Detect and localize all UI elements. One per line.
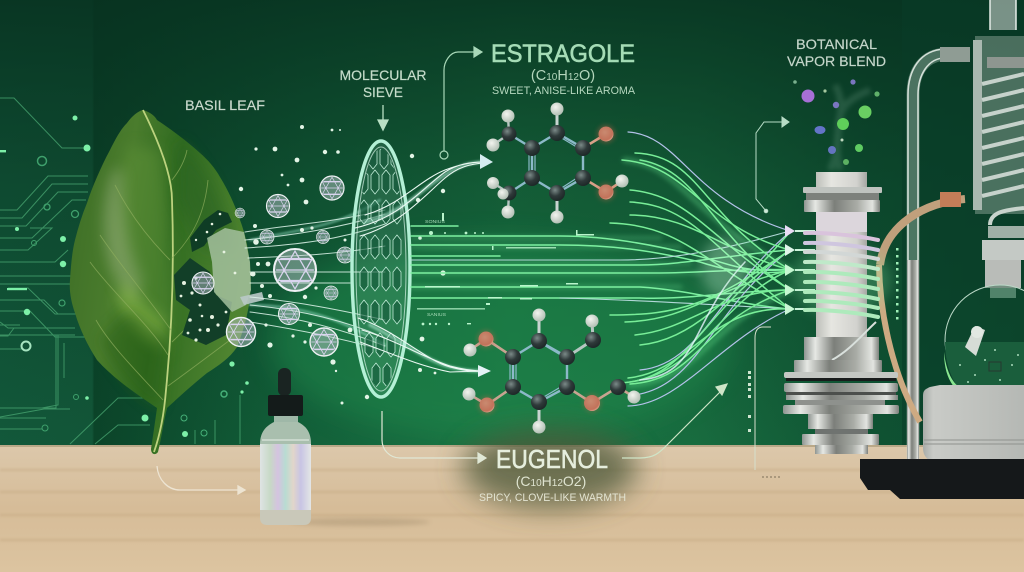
column reactor — [783, 172, 899, 454]
tiny label: SANIUS — [427, 312, 446, 317]
heading: botanical vapor blend: VAPOR BLEND — [787, 53, 886, 69]
heating mantle — [923, 385, 1024, 466]
vapor particles — [793, 79, 880, 170]
arrowheads into coils — [785, 225, 815, 315]
heading: eugenol: (C10H12O2) — [516, 473, 586, 489]
heading: estragole: (C10H12O) — [531, 68, 595, 84]
flask — [944, 260, 1024, 395]
table surface — [0, 428, 1024, 572]
output strands to heater — [610, 132, 790, 406]
heading: molecular sieve: MOLECULAR — [340, 67, 426, 83]
glass stand and tubes — [907, 47, 970, 470]
heading: molecular sieve: SIEVE — [363, 84, 403, 100]
circuit traces — [0, 98, 240, 444]
condenser column — [973, 0, 1024, 260]
heading: botanical vapor blend: BOTANICAL — [796, 36, 877, 52]
particle streams: leaf to sieve — [245, 200, 385, 348]
arrow: eugenol to heater — [622, 384, 727, 458]
dotted column marks — [896, 248, 898, 320]
leaf dissolving pattern — [174, 210, 264, 345]
arrow: sieve label down — [378, 105, 388, 130]
heading: estragole — [491, 40, 636, 97]
background: green circuit wall — [0, 0, 1024, 446]
molecular sieve — [352, 141, 410, 397]
icon: dropper bottle — [260, 368, 311, 525]
tan hose — [879, 192, 965, 422]
molecule: eugenol — [462, 308, 640, 434]
dotted data marks — [417, 213, 594, 325]
lab stand base — [860, 459, 1024, 499]
molecule: estragole — [486, 102, 628, 224]
arrow: leaf to bottle — [157, 466, 245, 494]
heading: eugenol — [479, 444, 626, 504]
data lines through center — [411, 226, 790, 309]
arrow: node to estragole — [440, 47, 482, 159]
heading: estragole: ESTRAGOLE — [491, 40, 635, 68]
icon: basil leaf — [70, 110, 264, 454]
circuit nodes — [0, 116, 249, 437]
arrow: sieve to eugenol — [382, 411, 486, 463]
bracket line lower right — [748, 327, 782, 477]
stream arrow to estragole — [355, 154, 493, 236]
tiny label: SONIUS — [425, 219, 445, 224]
heading: botanical vapor blend — [787, 36, 886, 69]
label: basil leaf: BASIL LEAF — [185, 97, 265, 113]
heading: eugenol: EUGENOL — [496, 444, 608, 474]
floating molecular spheres — [192, 125, 446, 404]
heading: estragole: SWEET, ANISE-LIKE AROMA — [492, 85, 636, 97]
heading: molecular sieve — [340, 67, 426, 100]
stream arrow to eugenol — [358, 318, 491, 377]
heading: eugenol: SPICY, CLOVE-LIKE WARMTH — [479, 492, 626, 504]
arrow: node to vapor — [756, 117, 789, 213]
